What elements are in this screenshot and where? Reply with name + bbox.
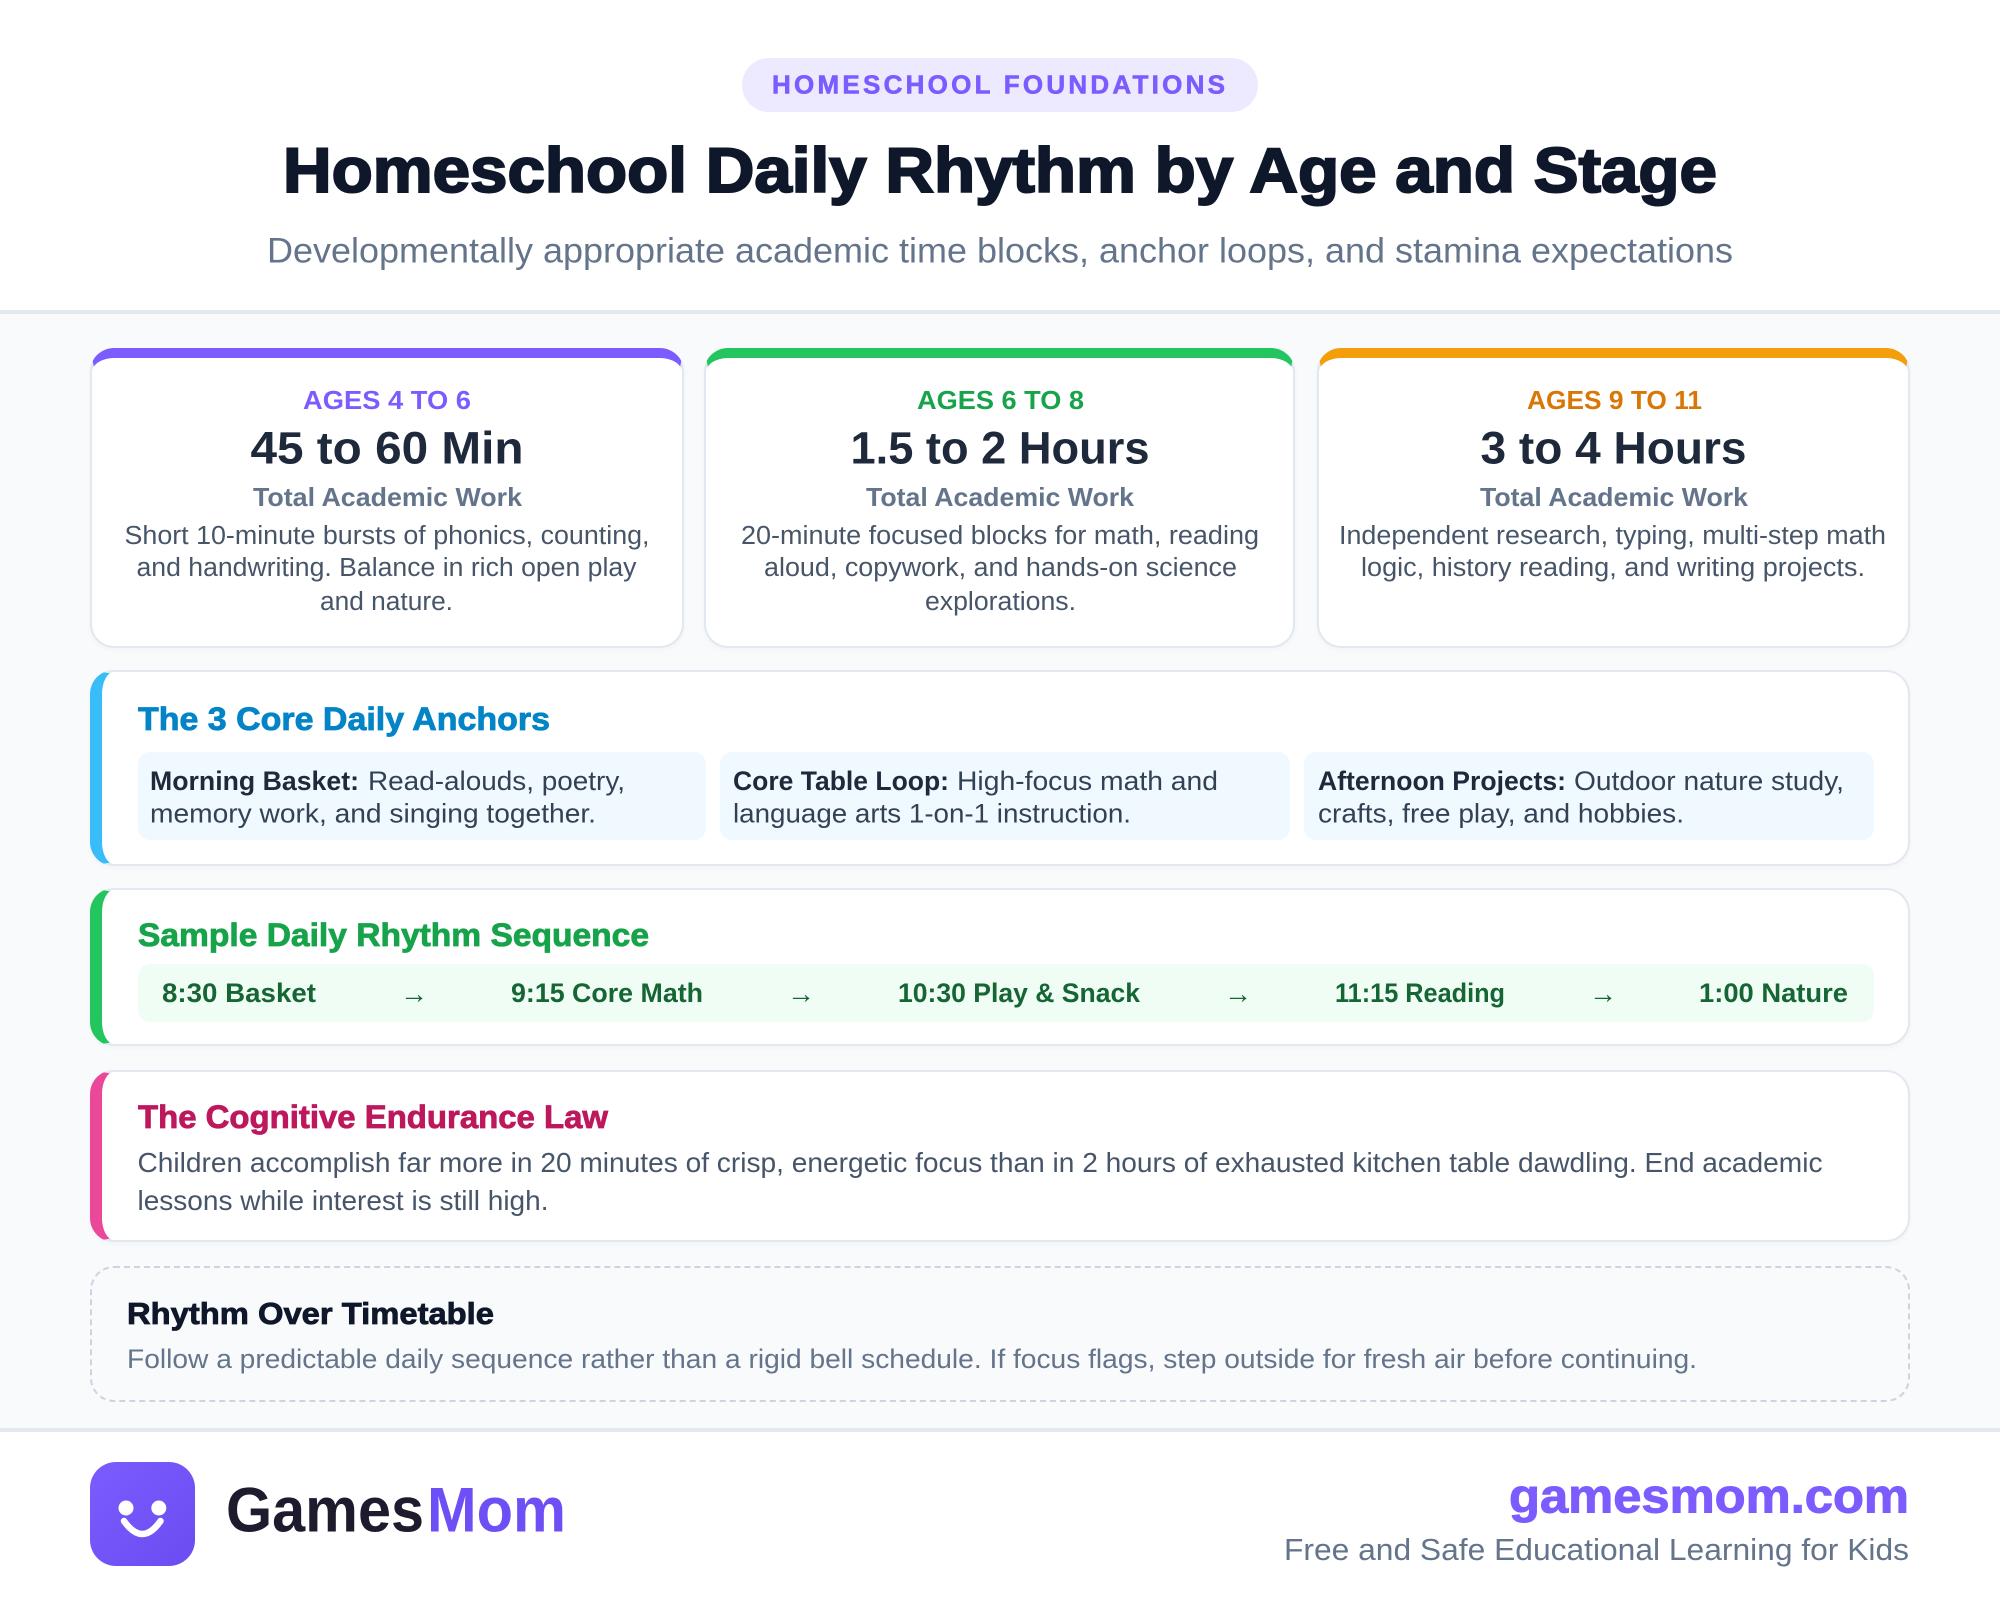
icon: smiling logo (90, 1462, 195, 1566)
age label: AGES 6 TO 8 (917, 385, 1084, 415)
anchor: afternoon projects: crafts, free play, and hobbies. (1318, 798, 1684, 828)
description: Children accomplish far more in 20 minutes of crisp, energetic focus than in 2 hours of exhausted kitchen table dawdling. End academic (138, 1147, 1823, 1178)
anchor: core table loop (720, 752, 1290, 840)
step: core math: 9:15 Core Math (511, 978, 703, 1008)
description: and nature. (320, 588, 453, 616)
description: lessons while interest is still high. (138, 1185, 548, 1216)
heading: The 3 Core Daily Anchors (138, 701, 550, 737)
header (0, 0, 2000, 314)
description: logic, history reading, and writing projects. (1361, 554, 1865, 582)
academic time: 3 to 4 Hours (1480, 422, 1746, 474)
arrow: → (1589, 978, 1617, 1009)
description (1339, 522, 1886, 582)
description (741, 522, 1259, 616)
anchor: morning basket: Read-alouds, poetry, (368, 766, 625, 796)
panel: cognitive endurance law (90, 1070, 1910, 1242)
anchor: core table loop: High-focus math and (957, 766, 1218, 796)
panel: ages 6 to 8 (704, 348, 1295, 648)
academic time: 45 to 60 Min (250, 422, 524, 474)
arrow: → (1224, 978, 1252, 1009)
anchor: core table loop: language arts 1-on-1 instruction. (733, 798, 1131, 828)
step: basket: 8:30 Basket (162, 978, 316, 1008)
step: reading: 11:15 Reading (1335, 978, 1505, 1008)
heading: Sample Daily Rhythm Sequence (138, 917, 649, 953)
sequence bar (138, 964, 1874, 1022)
age label: AGES 4 TO 6 (303, 385, 471, 415)
heading: Rhythm Over Timetable (127, 1296, 494, 1331)
description (138, 1147, 1823, 1216)
description: Follow a predictable daily sequence rather than a rigid bell schedule. If focus flags, step outside for fresh air before continuing. (127, 1344, 1697, 1374)
panel: core daily anchors (90, 670, 1910, 866)
arrow: → (787, 978, 815, 1009)
description: Short 10-minute bursts of phonics, counting, (124, 522, 650, 550)
anchor: morning basket (138, 752, 706, 840)
panel: rhythm over timetable (90, 1266, 1910, 1402)
academic time: 1.5 to 2 Hours (850, 422, 1150, 474)
step: nature: 1:00 Nature (1699, 978, 1848, 1008)
anchor: afternoon projects (1304, 752, 1874, 840)
anchor: core table loop: Core Table Loop: (733, 766, 949, 796)
title: Homeschool Daily Rhythm by Age and Stage (283, 136, 1717, 206)
step: play and snack: 10:30 Play & Snack (898, 978, 1141, 1008)
description: 20-minute focused blocks for math, reading (741, 522, 1259, 550)
footer (0, 1428, 2000, 1598)
sublabel: Total Academic Work (866, 482, 1135, 512)
heading: The Cognitive Endurance Law (138, 1099, 608, 1135)
sublabel: Total Academic Work (1480, 482, 1749, 512)
tagline: Free and Safe Educational Learning for Kids (1284, 1532, 1909, 1567)
website: gamesmom.com (1509, 1470, 1909, 1524)
eyebrow pill (742, 58, 1258, 112)
panel: ages 9 to 11 (1317, 348, 1910, 648)
brand wordmark (226, 1476, 566, 1546)
anchor: morning basket: memory work, and singing together. (150, 798, 596, 828)
brand wordmark: Mom (427, 1476, 566, 1546)
panel: sample daily rhythm (90, 888, 1910, 1046)
description (124, 522, 650, 616)
sublabel: Total Academic Work (253, 482, 523, 512)
subtitle: Developmentally appropriate academic time blocks, anchor loops, and stamina expectations (267, 232, 1733, 270)
arrow: → (400, 978, 428, 1009)
description: Independent research, typing, multi-step math (1339, 522, 1886, 550)
age label: AGES 9 TO 11 (1527, 385, 1702, 415)
brand wordmark: Games (226, 1476, 424, 1546)
anchor: morning basket: Morning Basket: (150, 766, 359, 796)
description: explorations. (925, 588, 1076, 616)
anchor: afternoon projects: Afternoon Projects: (1318, 766, 1566, 796)
description: aloud, copywork, and hands-on science (764, 554, 1237, 582)
anchor: afternoon projects: Outdoor nature study, (1574, 766, 1844, 796)
description: and handwriting. Balance in rich open play (136, 554, 637, 582)
panel: ages 4 to 6 (90, 348, 684, 648)
eyebrow pill: HOMESCHOOL FOUNDATIONS (772, 70, 1225, 100)
